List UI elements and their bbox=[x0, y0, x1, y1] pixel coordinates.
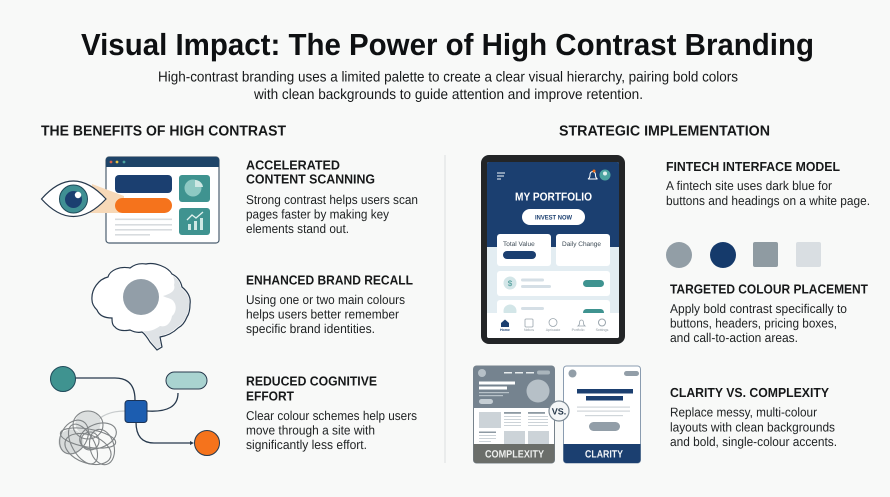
subtitle: High-contrast branding uses a limited palette to create a clear visual hierarchy, pairing bold colors bbox=[158, 70, 738, 86]
text: targeted colour placement bbox=[670, 282, 868, 345]
text: targeted colour placement: TARGETED COLOUR PLACEMENT bbox=[670, 282, 868, 296]
text: targeted colour placement: buttons, headers, pricing boxes, bbox=[670, 316, 837, 330]
text: reduced cognitive effort: Clear colour schemes help users bbox=[246, 408, 417, 423]
subtitle bbox=[158, 70, 738, 103]
text: clarity vs complexity: CLARITY VS. COMPLEXITY bbox=[670, 385, 829, 400]
text: accelerated content scanning bbox=[246, 158, 418, 236]
tablet mockup: my portfolio: Total Value bbox=[503, 241, 535, 248]
panel: complexity: COMPLEXITY bbox=[485, 448, 544, 460]
tablet mockup: my portfolio: Portfolio bbox=[572, 328, 584, 332]
text: accelerated content scanning: ACCELERATED bbox=[246, 158, 340, 172]
badge: vs: VS. bbox=[552, 406, 566, 416]
text: fintech interface model: FINTECH INTERFACE MODEL bbox=[666, 159, 840, 174]
text: enhanced brand recall: ENHANCED BRAND RECALL bbox=[246, 272, 413, 288]
text: reduced cognitive effort: significantly less effort. bbox=[246, 437, 367, 452]
text: enhanced brand recall: helps users better remember bbox=[246, 306, 400, 322]
badge: vs bbox=[549, 401, 569, 421]
text: enhanced brand recall bbox=[246, 272, 413, 336]
text: reduced cognitive effort: move through a site with bbox=[246, 422, 375, 438]
icon: tangled scribble routed into clear flow bbox=[50, 366, 220, 470]
text: enhanced brand recall: specific brand identities. bbox=[246, 321, 375, 336]
title: Visual Impact: The Power of High Contrast Branding bbox=[81, 28, 814, 62]
tablet mockup: my portfolio: Daily Change bbox=[562, 241, 601, 248]
text: reduced cognitive effort bbox=[246, 374, 417, 452]
heading: benefits: THE BENEFITS OF HIGH CONTRAST bbox=[41, 124, 286, 140]
comparison: complexity vs clarity bbox=[474, 366, 640, 463]
icon: brain with grey focus circle bbox=[92, 264, 190, 350]
tablet mockup: my portfolio: Settings bbox=[596, 328, 609, 332]
tablet mockup: my portfolio: Apricaste bbox=[546, 328, 560, 332]
tablet mockup: my portfolio: $ bbox=[508, 279, 513, 288]
subtitle: with clean backgrounds to guide attention and improve retention. bbox=[253, 87, 643, 103]
text: accelerated content scanning: elements stand out. bbox=[246, 221, 349, 236]
text: accelerated content scanning: pages faster by making key bbox=[246, 206, 390, 222]
colour swatches bbox=[666, 242, 821, 268]
panel: clarity bbox=[564, 366, 640, 463]
text: clarity vs complexity: Replace messy, multi-colour bbox=[670, 404, 818, 420]
text: clarity vs complexity: and bold, single-colour accents. bbox=[670, 434, 837, 449]
icon: eye scanning a browser window bbox=[42, 157, 219, 243]
panel: complexity bbox=[474, 366, 554, 463]
text: reduced cognitive effort: EFFORT bbox=[246, 388, 294, 404]
text: reduced cognitive effort: REDUCED COGNITIVE bbox=[246, 374, 377, 388]
text: fintech interface model: A fintech site uses dark blue for bbox=[666, 178, 833, 193]
text: enhanced brand recall: Using one or two main colours bbox=[246, 292, 405, 307]
heading: strategic implementation: STRATEGIC IMPLEMENTATION bbox=[559, 124, 770, 140]
text: targeted colour placement: Apply bold contrast specifically to bbox=[670, 301, 847, 316]
text: fintech interface model: buttons and headings on a white page. bbox=[666, 193, 870, 208]
text: fintech interface model bbox=[666, 159, 870, 208]
tablet mockup: my portfolio: MY PORTFOLIO bbox=[515, 192, 592, 204]
text: clarity vs complexity: layouts with clean backgrounds bbox=[670, 420, 835, 434]
text: accelerated content scanning: Strong contrast helps users scan bbox=[246, 192, 418, 207]
tablet mockup: my portfolio bbox=[481, 155, 625, 344]
tablet mockup: my portfolio: Nebos bbox=[524, 328, 534, 332]
tablet mockup: my portfolio: INVEST NOW bbox=[535, 214, 573, 222]
panel: clarity: CLARITY bbox=[585, 448, 623, 460]
text: targeted colour placement: and call-to-action areas. bbox=[670, 330, 798, 345]
tablet mockup: my portfolio: Home bbox=[500, 328, 510, 332]
text: accelerated content scanning: CONTENT SCANNING bbox=[246, 172, 375, 186]
text: clarity vs complexity bbox=[670, 385, 837, 449]
